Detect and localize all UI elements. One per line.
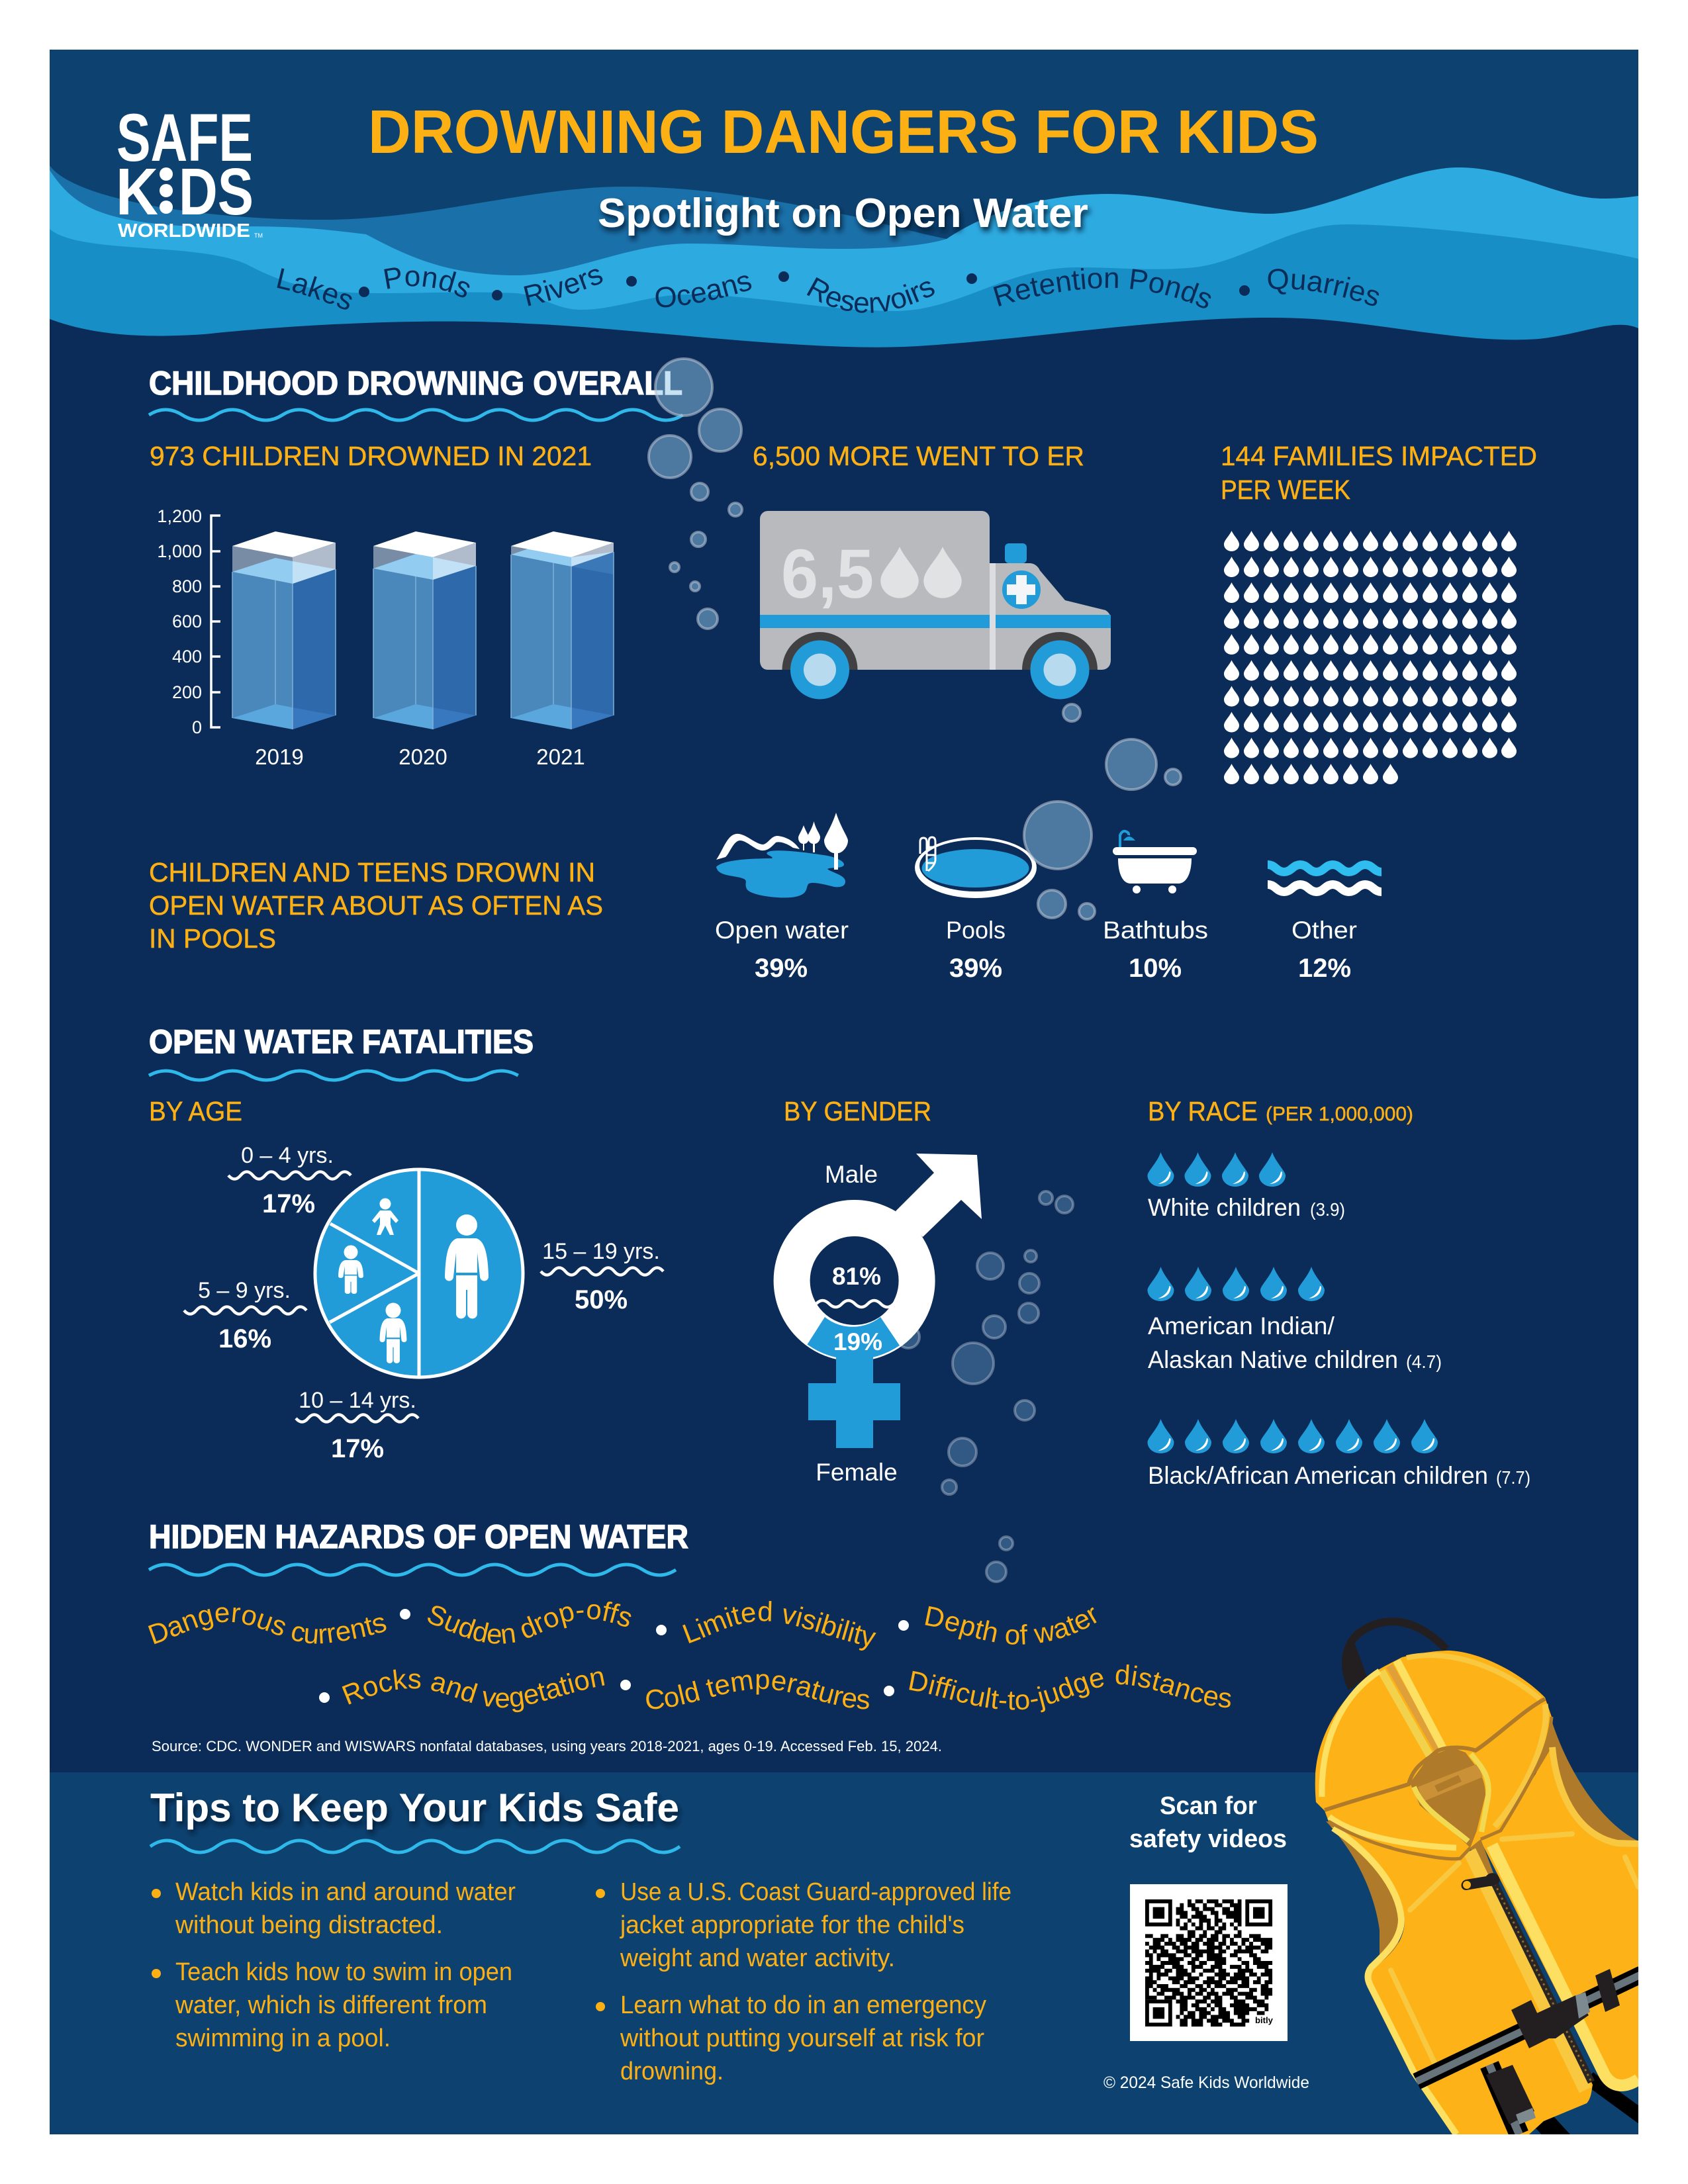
labels: location breakdown: 39%: [755, 954, 808, 983]
tips: right column: drowning.: [620, 2058, 724, 2085]
rate: American Indian / Alaskan Native children: [1148, 1267, 1442, 1373]
bubbles: lower stream: [897, 1191, 1073, 1582]
labels: location breakdown: 39%: [949, 954, 1002, 983]
bar 2019: [232, 531, 336, 729]
QR code: bitly: [1255, 2015, 1274, 2025]
source note: Source: CDC. WONDER and WISWARS nonfatal databases, using years 2018-2021, ages 0-19. Accessed Feb. 15, 2024.: [152, 1738, 942, 1754]
wave underline: [149, 1565, 676, 1575]
chart: gender symbol 81 vs 19 percent: [792, 1154, 982, 1448]
logo: Safe Kids Worldwide: SAFE: [117, 100, 253, 175]
QR code: [1130, 1884, 1288, 2041]
stat heading: 144 families: 144 FAMILIES IMPACTED: [1221, 441, 1537, 471]
labels: location breakdown: Other: [1291, 917, 1357, 944]
label: 15-19 yrs: 15 – 19 yrs.: [542, 1239, 660, 1264]
rate: Black/African American children: Black/African American children: [1148, 1462, 1488, 1489]
tips: right column: weight and water activity.: [620, 1944, 895, 1972]
labels: location breakdown: Bathtubs: [1103, 917, 1208, 944]
panel: header with waves: [50, 50, 1638, 410]
heading: tips: Tips to Keep Your Kids Safe: [150, 1786, 679, 1830]
text: scan for safety videos: safety videos: [1129, 1825, 1287, 1853]
chart axis: 1,200: [157, 506, 202, 526]
tips: right column: without putting yourself at risk for: [620, 2025, 984, 2052]
tips: left column: without being distracted.: [175, 1911, 443, 1939]
label: 0-4 yrs: 17%: [262, 1189, 315, 1218]
bar 2020: [373, 531, 476, 729]
bubbles: upper stream: [649, 359, 1181, 919]
labels: location breakdown: Open water: [715, 917, 849, 944]
icon: ambulance: 6,5: [781, 535, 874, 613]
icon: adult: [445, 1214, 489, 1318]
label: 0-4 yrs: [228, 1143, 351, 1218]
tips: right column: Use a U.S. Coast Guard-approved life: [620, 1878, 1011, 1906]
logo: Safe Kids Worldwide: [116, 100, 263, 242]
rate: American Indian / Alaskan Native children: Alaskan Native children: [1148, 1346, 1398, 1373]
icon: open water lake: [716, 813, 848, 897]
tips: left column: [152, 1878, 516, 2052]
chart: gender symbol 81 vs 19 percent: 81%: [832, 1263, 881, 1290]
bar 2021: [511, 531, 614, 729]
year labels: 2020: [399, 745, 447, 769]
labels: location breakdown: 12%: [1298, 954, 1351, 983]
chart axis: [157, 506, 220, 737]
label: 10-14 yrs: [296, 1388, 418, 1463]
logo: Safe Kids Worldwide: K: [116, 155, 158, 229]
labels: location breakdown: [715, 917, 1357, 983]
year labels: 2021: [536, 745, 585, 769]
label: 15-19 yrs: 50%: [575, 1285, 628, 1314]
stat heading: 973 children: 973 CHILDREN DROWNED IN 2021: [150, 441, 592, 471]
heading: by gender: BY GENDER: [784, 1096, 931, 1126]
rate: American Indian / Alaskan Native children: (4.7): [1406, 1351, 1442, 1372]
list: types of open water: Quarries: [1268, 269, 1380, 306]
heading: open water fatalities: OPEN WATER FATALITIES: [149, 1023, 534, 1060]
heading: hidden hazards: HIDDEN HAZARDS OF OPEN WATER: [149, 1518, 688, 1555]
rate: Black/African American children: (7.7): [1496, 1467, 1530, 1488]
text block: open water vs pools: OPEN WATER ABOUT AS OFTEN AS: [149, 890, 603, 921]
list: hidden hazards: Dangerous currents: [148, 1607, 387, 1644]
pie chart: fatalities by age: [315, 1169, 523, 1377]
subtitle: Spotlight on Open Water: [598, 191, 1088, 236]
tips: left column: Watch kids in and around water: [175, 1878, 516, 1906]
chart axis: 800: [172, 576, 202, 596]
tips: left column: swimming in a pool.: [175, 2025, 391, 2052]
text: scan for safety videos: Scan for: [1160, 1792, 1257, 1820]
icon array: 144 water drops: [1224, 531, 1517, 784]
label: female: Female: [816, 1459, 898, 1486]
wave underline: [149, 410, 682, 420]
tips: right column: [596, 1878, 1011, 2085]
chart axis: 600: [172, 612, 202, 631]
label: 5-9 yrs: [184, 1278, 306, 1353]
icon: teen: [380, 1302, 406, 1363]
heading: childhood drowning overall: CHILDHOOD DROWNING OVERALL: [149, 365, 682, 402]
chart: gender symbol 81 vs 19 percent: 19%: [833, 1328, 882, 1355]
icon: other water waves: [1260, 864, 1389, 892]
bubbles: middle: [1024, 801, 1092, 869]
title: DROWNING DANGERS FOR KIDS: [368, 97, 1319, 166]
tips: left column: water, which is different from: [175, 1991, 487, 2019]
list: types of open water: Ponds: [384, 267, 470, 298]
rate: Black/African American children: [1148, 1419, 1530, 1489]
list: hidden hazards: Rocks and vegetation: [342, 1669, 605, 1713]
logo: Safe Kids Worldwide: WORLDWIDE: [118, 220, 250, 242]
rate: white children: (3.9): [1310, 1199, 1345, 1220]
label: male: Male: [825, 1161, 878, 1188]
panel: tips band: [50, 1772, 1638, 2134]
illustration: life jacket: [1315, 1621, 1643, 2143]
text block: open water vs pools: CHILDREN AND TEENS DROWN IN: [149, 857, 595, 887]
rate: white children: [1148, 1152, 1345, 1221]
heading: by race: BY RACE: [1148, 1096, 1258, 1126]
text: scan for safety videos: [1129, 1792, 1287, 1853]
year labels: 2019: [255, 745, 304, 769]
wave underline: [149, 1071, 518, 1080]
logo: Safe Kids Worldwide: TM: [254, 232, 263, 239]
list: types of open water: Oceans: [655, 275, 752, 307]
rate: American Indian / Alaskan Native children: American Indian/: [1148, 1312, 1335, 1340]
list: types of open water: Retention Ponds: [993, 267, 1211, 308]
year labels: [255, 745, 585, 769]
icon: swimming pool: [915, 837, 1037, 898]
list: hidden hazards: Cold temperatures: [646, 1674, 869, 1709]
label: 10-14 yrs: 10 – 14 yrs.: [299, 1388, 416, 1413]
label: 15-19 yrs: [541, 1239, 663, 1314]
chart axis: 200: [172, 682, 202, 702]
chart axis: 0: [192, 717, 202, 737]
text block: open water vs pools: IN POOLS: [149, 923, 276, 954]
list: hidden hazards: Sudden drop-offs: [428, 1602, 632, 1644]
label: 5-9 yrs: 16%: [218, 1324, 271, 1353]
list: types of open water: Reservoirs: [806, 277, 935, 313]
logo: Safe Kids Worldwide: DS: [179, 155, 254, 229]
list: types of open water: Rivers: [524, 269, 602, 306]
list: types of open water: [277, 267, 1380, 313]
list: hidden hazards: Difficult-to-judge distances: [909, 1664, 1231, 1713]
stat heading: 6,500 ER: 6,500 MORE WENT TO ER: [753, 441, 1084, 471]
stat heading: 144 families: [1221, 441, 1537, 505]
wave underline: [150, 1841, 680, 1852]
icon: bathtub: [1113, 831, 1197, 893]
stat heading: 144 families: PER WEEK: [1221, 475, 1350, 505]
tips: right column: Learn what to do in an emergency: [620, 1991, 986, 2019]
icon: ambulance: [760, 511, 1111, 707]
chart axis: 1,000: [157, 541, 202, 561]
labels: location breakdown: 10%: [1129, 954, 1182, 983]
labels: location breakdown: Pools: [946, 917, 1006, 944]
icon: child: [338, 1246, 363, 1294]
bar chart: drownings by year: [157, 506, 614, 769]
list: types of open water: Lakes: [277, 268, 352, 310]
list: hidden hazards: Limited visibility: [682, 1601, 876, 1651]
text block: open water vs pools: [149, 857, 603, 954]
tips: right column: jacket appropriate for the child's: [620, 1911, 964, 1939]
label: 0-4 yrs: 0 – 4 yrs.: [241, 1143, 334, 1168]
heading: by age: BY AGE: [149, 1096, 242, 1126]
heading: by race: (PER 1,000,000): [1266, 1103, 1413, 1125]
list: hidden hazards: Depth of water: [925, 1606, 1097, 1645]
heading: by race: [1148, 1096, 1413, 1126]
label: 10-14 yrs: 17%: [331, 1434, 384, 1463]
label: 5-9 yrs: 5 – 9 yrs.: [198, 1278, 291, 1303]
icon: baby: [372, 1198, 399, 1235]
list: hidden hazards: [148, 1601, 1231, 1713]
copyright: © 2024 Safe Kids Worldwide: [1103, 2073, 1309, 2092]
tips: left column: Teach kids how to swim in open: [175, 1958, 512, 1986]
rate: white children: White children: [1148, 1194, 1301, 1221]
chart axis: 400: [172, 647, 202, 666]
